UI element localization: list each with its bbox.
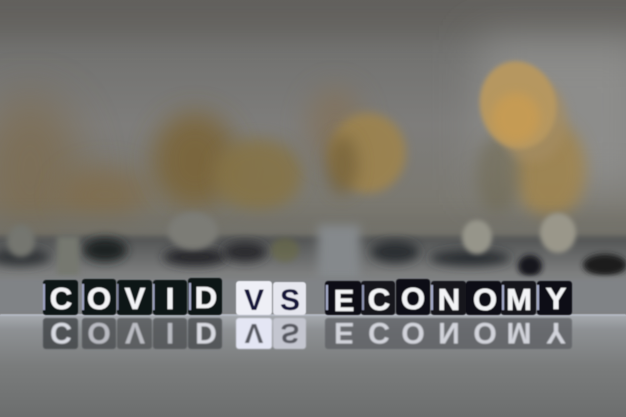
beads: COVID: C — [50, 281, 72, 316]
reflection: COVID: D — [195, 316, 217, 349]
beads: VS — [236, 281, 306, 317]
beads: COVID: O — [87, 281, 111, 316]
beads: COVID: I — [166, 281, 174, 316]
blurred gold coins — [0, 54, 586, 245]
beads: ECONOMY: O — [401, 281, 425, 316]
reflection: VS: S — [281, 318, 299, 349]
beads: ECONOMY: E — [334, 283, 354, 318]
reflection: COVID: V — [125, 316, 145, 349]
reflection: COVID: O — [87, 316, 111, 349]
reflection: ECONOMY: C — [368, 316, 390, 349]
reflection: ECONOMY: N — [438, 316, 460, 349]
reflection: beads mirrored in table — [43, 316, 572, 349]
reflection: COVID: I — [166, 316, 174, 349]
reflection: ECONOMY — [325, 316, 572, 349]
beads: COVID — [43, 278, 222, 316]
beads: ECONOMY: C — [368, 282, 390, 317]
reflection: ECONOMY: Y — [546, 316, 566, 349]
beads: ECONOMY: Y — [546, 281, 567, 316]
reflection: COVID — [43, 316, 222, 349]
reflection: ECONOMY: M — [506, 316, 532, 349]
reflection: ECONOMY: O — [473, 316, 497, 349]
beads: ECONOMY: M — [506, 282, 532, 317]
reflection: VS: V — [245, 318, 264, 349]
reflection: VS — [236, 318, 306, 349]
beads: COVID: V — [125, 281, 146, 316]
reflection: COVID: C — [50, 316, 72, 349]
reflection: ECONOMY: E — [334, 316, 354, 349]
beads: VS: V — [244, 284, 264, 317]
table surface — [0, 277, 626, 417]
dark blurred band behind beads — [0, 212, 626, 280]
beads: COVID: D — [195, 280, 217, 315]
beads: VS: S — [280, 284, 300, 317]
reflection: ECONOMY: O — [401, 316, 425, 349]
beads: ECONOMY — [325, 279, 572, 318]
beads: ECONOMY: N — [438, 282, 460, 317]
beads: ECONOMY: O — [473, 282, 497, 317]
